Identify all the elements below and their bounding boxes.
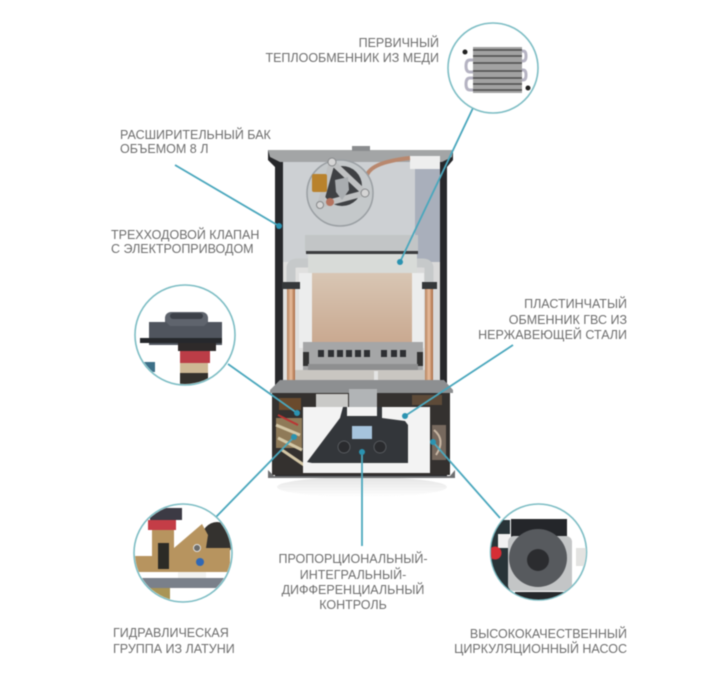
callout line: pump	[430, 439, 500, 518]
circle: hydraulic group	[130, 504, 240, 602]
label: PID control: ПРОПОРЦИОНАЛЬНЫЙ-	[278, 551, 428, 566]
label: plate exchanger: ОБМЕННИК ГВС ИЗ	[509, 313, 627, 327]
label: three-way valve: С ЭЛЕКТРОПРИВОДОМ	[111, 242, 254, 256]
circle: primary heat exchanger	[448, 23, 538, 113]
label: PID control: ДИФФЕРЕНЦИАЛЬНЫЙ	[282, 582, 424, 597]
callout line: plate exchanger	[402, 345, 513, 419]
label: PID control: КОНТРОЛЬ	[319, 598, 387, 612]
callout line: PID control	[359, 449, 365, 546]
lower compartment	[272, 393, 450, 475]
top plate	[268, 150, 453, 162]
label: hydraulic group: ГРУППА ИЗ ЛАТУНИ	[113, 642, 235, 656]
boiler	[268, 146, 455, 497]
callout line: heat exchanger	[397, 108, 473, 265]
right inner panel	[415, 162, 440, 262]
label: expansion tank: ОБЪЕМОМ 8 Л	[120, 142, 208, 156]
burner	[303, 342, 423, 370]
fan	[307, 158, 373, 226]
circle: three-way valve	[135, 285, 235, 385]
shelf	[305, 235, 418, 252]
callout line: hydraulic group	[216, 434, 297, 517]
label: primary heat exchanger: ТЕПЛООБМЕННИК ИЗ МЕДИ	[265, 51, 439, 65]
heat exchanger box	[308, 254, 417, 274]
label: PID control: ИНТЕГРАЛЬНЫЙ-	[300, 567, 406, 582]
label: primary heat exchanger: ПЕРВИЧНЫЙ	[359, 35, 439, 50]
callout line: expansion tank	[175, 165, 282, 229]
label: expansion tank: РАСШИРИТЕЛЬНЫЙ БАК	[120, 127, 272, 142]
label: three-way valve: ТРЕХХОДОВОЙ КЛАПАН	[111, 227, 259, 242]
bracket	[349, 389, 377, 409]
label: hydraulic group: ГИДРАВЛИЧЕСКАЯ	[113, 626, 229, 640]
right wiring	[412, 395, 446, 460]
lower shelf	[270, 380, 453, 393]
display	[352, 426, 372, 439]
control panel	[307, 407, 408, 463]
label: plate exchanger: НЕРЖАВЕЮЩЕЙ СТАЛИ	[478, 327, 627, 342]
combustion chamber	[312, 273, 412, 345]
boiler back and side walls	[268, 150, 453, 478]
label: plate exchanger: ПЛАСТИНЧАТЫЙ	[524, 296, 627, 311]
label: circulation pump: ВЫСОКОКАЧЕСТВЕННЫЙ	[470, 626, 627, 641]
pipes	[282, 263, 437, 384]
white panel	[303, 407, 430, 473]
label: circulation pump: ЦИРКУЛЯЦИОННЫЙ НАСОС	[454, 641, 627, 656]
left wiring	[276, 398, 304, 465]
callout line: three-way valve	[228, 364, 300, 416]
circle: circulation pump	[488, 504, 586, 600]
